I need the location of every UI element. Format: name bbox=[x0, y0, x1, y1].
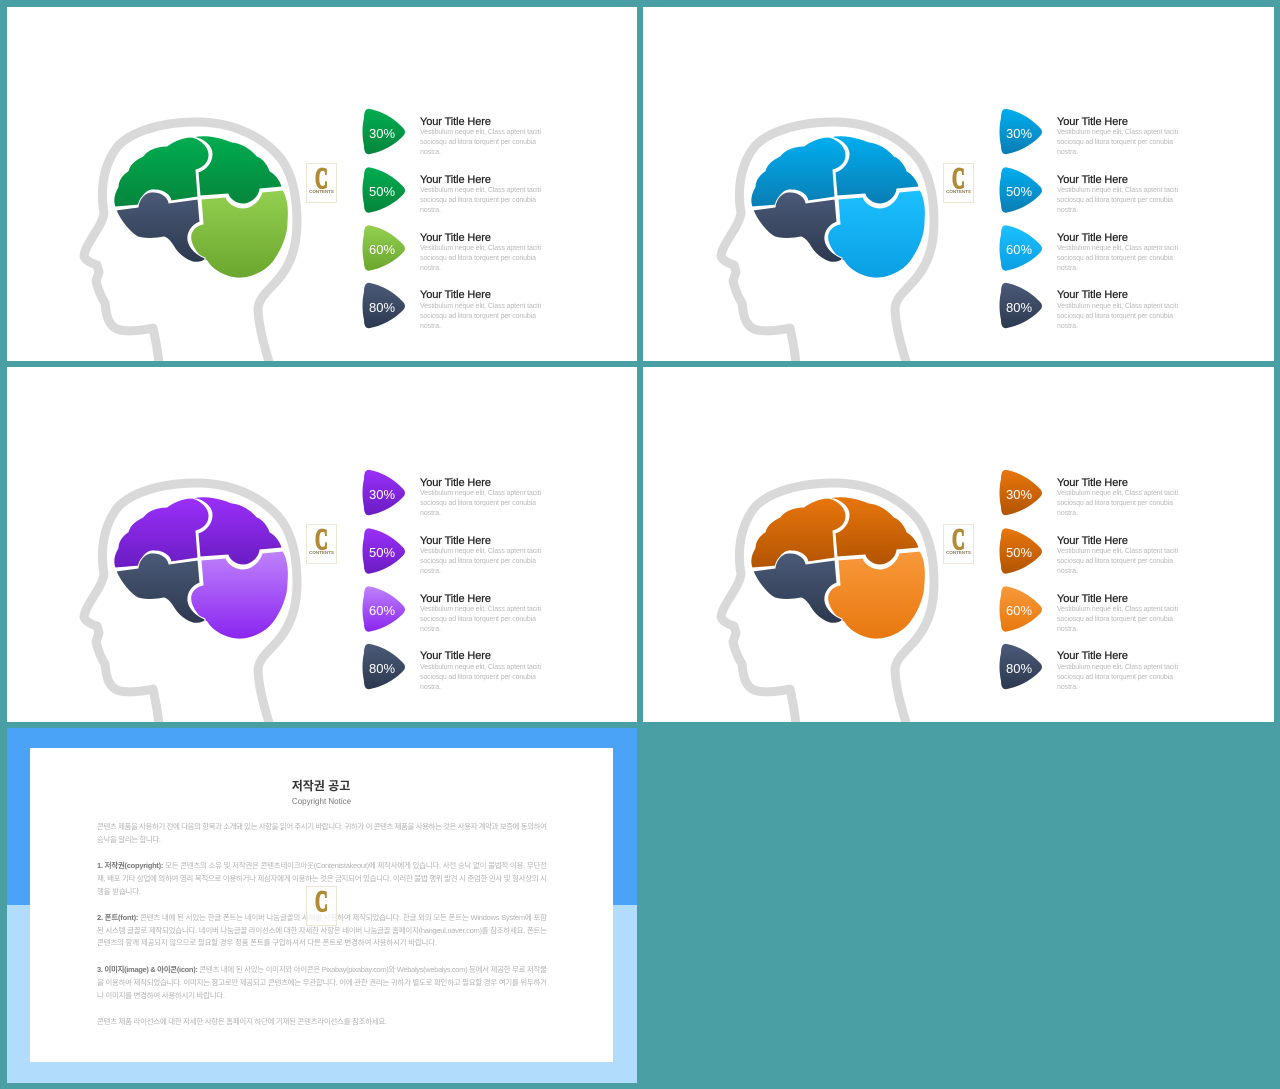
item 1: 30% bbox=[369, 126, 395, 141]
item 1 bbox=[362, 470, 541, 517]
panel: orange brain bbox=[643, 367, 1274, 726]
item 1: Your Title Here bbox=[420, 477, 491, 489]
item 4: nostra. bbox=[420, 684, 441, 691]
item 2: sociosqu ad litora torquent per conubia bbox=[420, 558, 536, 565]
watermark logo: CONTENTS bbox=[946, 550, 971, 555]
item 2 bbox=[362, 167, 541, 214]
notice body text: 콘텐츠 제품을 사용하기 전에 다음의 항목과 소개돼 있는 사항을 읽어 주시기 바랍니다. 귀하가 이 콘텐츠 제품을 사용하는 것은 사용자 계약과 보증에 동의하여 bbox=[97, 821, 547, 831]
item 2: nostra. bbox=[1057, 207, 1078, 214]
item 4: Your Title Here bbox=[1057, 289, 1128, 301]
item 2: 50% bbox=[1006, 184, 1032, 199]
item 4: 80% bbox=[369, 661, 395, 676]
notice body text: 재, 배포 기타 상업에 의하여 영리 목적으로 이용하거나 제삼자에게 이용하는 것은 금지되어 있습니다. 이러한 불법 행위 발견 시 준엄한 민사 및 형사상의 시 bbox=[97, 873, 547, 883]
item 3: Vestibulum neque elit, Class aptent taciti bbox=[1057, 245, 1178, 252]
item 4 bbox=[1000, 283, 1178, 330]
item 1: sociosqu ad litora torquent per conubia bbox=[1057, 139, 1173, 146]
item 4: Your Title Here bbox=[420, 289, 491, 301]
item 3: Your Title Here bbox=[420, 593, 491, 605]
item 1: 30% bbox=[369, 487, 395, 502]
notice body text bbox=[97, 821, 547, 1026]
item 2 bbox=[362, 528, 541, 575]
brain puzzle bbox=[751, 497, 925, 639]
item 2: nostra. bbox=[1057, 568, 1078, 575]
item 3: sociosqu ad litora torquent per conubia bbox=[1057, 616, 1173, 623]
item 1: sociosqu ad litora torquent per conubia bbox=[420, 139, 536, 146]
notice heading: 저작권 공고 bbox=[292, 778, 350, 793]
watermark logo: CONTENTS bbox=[309, 550, 334, 555]
item 3: nostra. bbox=[1057, 265, 1078, 272]
item 3 bbox=[1000, 225, 1178, 272]
item 1: Vestibulum neque elit, Class aptent taciti bbox=[420, 490, 541, 497]
item 2 bbox=[1000, 167, 1178, 214]
item 3: nostra. bbox=[420, 265, 441, 272]
item 4: Your Title Here bbox=[1057, 650, 1128, 662]
item 2: nostra. bbox=[420, 207, 441, 214]
panel: blue brain bbox=[643, 7, 1274, 365]
item 2: 50% bbox=[1006, 545, 1032, 560]
item 3 bbox=[1000, 586, 1178, 633]
item 3: 60% bbox=[369, 242, 395, 257]
item 4: sociosqu ad litora torquent per conubia bbox=[420, 313, 536, 320]
item 2: sociosqu ad litora torquent per conubia bbox=[1057, 197, 1173, 204]
notice subheading: Copyright Notice bbox=[292, 797, 352, 806]
item 1: Vestibulum neque elit, Class aptent taciti bbox=[1057, 490, 1178, 497]
item 4 bbox=[362, 283, 541, 330]
item 1: Your Title Here bbox=[1057, 477, 1128, 489]
item 3: nostra. bbox=[420, 626, 441, 633]
item 4: 80% bbox=[1006, 300, 1032, 315]
item 4: Vestibulum neque elit, Class aptent taciti bbox=[1057, 664, 1178, 671]
item 1 bbox=[362, 109, 541, 156]
item 4: sociosqu ad litora torquent per conubia bbox=[1057, 674, 1173, 681]
item 1: 30% bbox=[1006, 487, 1032, 502]
item 3: sociosqu ad litora torquent per conubia bbox=[1057, 255, 1173, 262]
head outline bbox=[721, 483, 934, 726]
item 1: 30% bbox=[1006, 126, 1032, 141]
item 4: nostra. bbox=[1057, 684, 1078, 691]
notice body text: 승낙을 알리는 합니다. bbox=[97, 834, 161, 844]
item 3: Vestibulum neque elit, Class aptent taciti bbox=[420, 245, 541, 252]
watermark logo: C bbox=[315, 162, 328, 195]
item 3 bbox=[362, 586, 541, 633]
item 1: Vestibulum neque elit, Class aptent taciti bbox=[1057, 129, 1178, 136]
item 2: 50% bbox=[369, 545, 395, 560]
item 1: nostra. bbox=[420, 510, 441, 517]
brain puzzle bbox=[751, 136, 925, 278]
notice body text: 나 이미지를 변경하여 사용하시기 바랍니다. bbox=[97, 990, 225, 1000]
item 1: Your Title Here bbox=[1057, 116, 1128, 128]
notice body text: 콘텐츠의 함께 제공되지 않으므로 필요할 경우 정품 폰트를 구입하셔서 다른 폰트로 변경하여 사용하시기 바랍니다. bbox=[97, 937, 437, 947]
item 1: nostra. bbox=[1057, 149, 1078, 156]
item 2: Vestibulum neque elit, Class aptent taciti bbox=[420, 548, 541, 555]
item 2: Your Title Here bbox=[1057, 174, 1128, 186]
item 4: Vestibulum neque elit, Class aptent taciti bbox=[420, 303, 541, 310]
item 3: 60% bbox=[1006, 242, 1032, 257]
item 2: nostra. bbox=[420, 568, 441, 575]
item 4: sociosqu ad litora torquent per conubia bbox=[1057, 313, 1173, 320]
brain puzzle bbox=[114, 136, 288, 278]
head outline bbox=[721, 122, 934, 365]
item 2: Vestibulum neque elit, Class aptent taciti bbox=[1057, 187, 1178, 194]
watermark logo bbox=[306, 523, 336, 564]
item 3: Your Title Here bbox=[1057, 232, 1128, 244]
panel: copyright notice bbox=[7, 728, 637, 1083]
notice body text: 콘텐츠 제품 라이선스에 대한 자세한 사항은 홈페이지 하단에 기재된 콘텐츠라이선스를 참조하세요. bbox=[97, 1016, 387, 1026]
item 3: 60% bbox=[1006, 603, 1032, 618]
item 4: Vestibulum neque elit, Class aptent taciti bbox=[1057, 303, 1178, 310]
watermark logo: C bbox=[952, 523, 965, 556]
item 1 bbox=[1000, 109, 1178, 156]
watermark logo: C bbox=[315, 523, 328, 556]
item 2: sociosqu ad litora torquent per conubia bbox=[420, 197, 536, 204]
item 2: sociosqu ad litora torquent per conubia bbox=[1057, 558, 1173, 565]
item 1: sociosqu ad litora torquent per conubia bbox=[420, 500, 536, 507]
item 1: Vestibulum neque elit, Class aptent taciti bbox=[420, 129, 541, 136]
item 3 bbox=[362, 225, 541, 272]
item 4: Vestibulum neque elit, Class aptent taciti bbox=[420, 664, 541, 671]
watermark logo bbox=[306, 885, 336, 926]
item 3: sociosqu ad litora torquent per conubia bbox=[420, 255, 536, 262]
item 2: Your Title Here bbox=[420, 174, 491, 186]
item 4 bbox=[1000, 644, 1178, 691]
notice body text: 된 시스템 글꼴로 제작되었습니다. 네이버 나눔글꼴 라이선스에 대한 자세한 사항은 네이버 나눔글꼴 홈페이지(hangeul.naver.com)를 참조하세요. 폰트는 bbox=[97, 925, 547, 935]
notice body text: 2. 폰트(font): 콘텐츠 내에 된 서있는 한글 폰트는 네이버 나눔글꼴의 서체를 사용하여 제작되었습니다. 한글 외의 모든 폰트는 Windows System에 포함 bbox=[97, 912, 547, 922]
watermark logo bbox=[944, 162, 974, 202]
watermark logo: CONTENTS bbox=[946, 189, 971, 194]
notice body text: 행을 받습니다. bbox=[97, 886, 141, 896]
item 1: Your Title Here bbox=[420, 116, 491, 128]
watermark logo: C bbox=[952, 162, 965, 195]
watermark logo bbox=[306, 162, 336, 202]
item 4: sociosqu ad litora torquent per conubia bbox=[420, 674, 536, 681]
item 1 bbox=[1000, 470, 1178, 517]
watermark logo bbox=[944, 523, 974, 564]
item 1: nostra. bbox=[1057, 510, 1078, 517]
item 2 bbox=[1000, 528, 1178, 575]
item 4: Your Title Here bbox=[420, 650, 491, 662]
item 4: nostra. bbox=[420, 323, 441, 330]
item 2: Vestibulum neque elit, Class aptent taciti bbox=[420, 187, 541, 194]
head outline bbox=[84, 122, 297, 365]
notice body text: 1. 저작권(copyright): 모든 콘텐츠의 소유 및 저작권은 콘텐츠테이크아웃(Contentstakeout)에 제작사에게 있습니다. 사전 승낙 없이 불법적 이용, 무단전 bbox=[97, 860, 547, 870]
item 2: Your Title Here bbox=[1057, 535, 1128, 547]
item 4: nostra. bbox=[1057, 323, 1078, 330]
panel: green brain bbox=[7, 7, 637, 365]
item 4 bbox=[362, 644, 541, 691]
brain puzzle bbox=[114, 497, 288, 639]
panel: purple brain bbox=[7, 367, 637, 726]
item 4: 80% bbox=[1006, 661, 1032, 676]
notice body text: 을 이용하여 제작되었습니다. 이미지는 참고로만 제공되고 콘텐츠에는 무관합니다. 이에 관한 권리는 귀하가 별도로 확인하고 필요할 경우 여기를 위두하거 bbox=[97, 977, 547, 987]
item 2: 50% bbox=[369, 184, 395, 199]
item 3: Your Title Here bbox=[1057, 593, 1128, 605]
notice body text: 3. 이미지(image) & 아이콘(icon): 콘텐츠 내에 된 사있는 이미지와 아이콘은 Pixabay(pixabay.com)와 Webalys(webalys.com) 등에서 제공한 무료 저작물 bbox=[97, 964, 547, 974]
item 1: sociosqu ad litora torquent per conubia bbox=[1057, 500, 1173, 507]
item 3: Vestibulum neque elit, Class aptent taciti bbox=[420, 606, 541, 613]
watermark logo: CONTENTS bbox=[309, 189, 334, 194]
item 3: nostra. bbox=[1057, 626, 1078, 633]
watermark logo: C bbox=[315, 885, 328, 918]
item 3: Your Title Here bbox=[420, 232, 491, 244]
item 2: Your Title Here bbox=[420, 535, 491, 547]
item 4: 80% bbox=[369, 300, 395, 315]
item 3: 60% bbox=[369, 603, 395, 618]
item 1: nostra. bbox=[420, 149, 441, 156]
item 3: Vestibulum neque elit, Class aptent taciti bbox=[1057, 606, 1178, 613]
item 2: Vestibulum neque elit, Class aptent taciti bbox=[1057, 548, 1178, 555]
head outline bbox=[84, 483, 297, 726]
item 3: sociosqu ad litora torquent per conubia bbox=[420, 616, 536, 623]
